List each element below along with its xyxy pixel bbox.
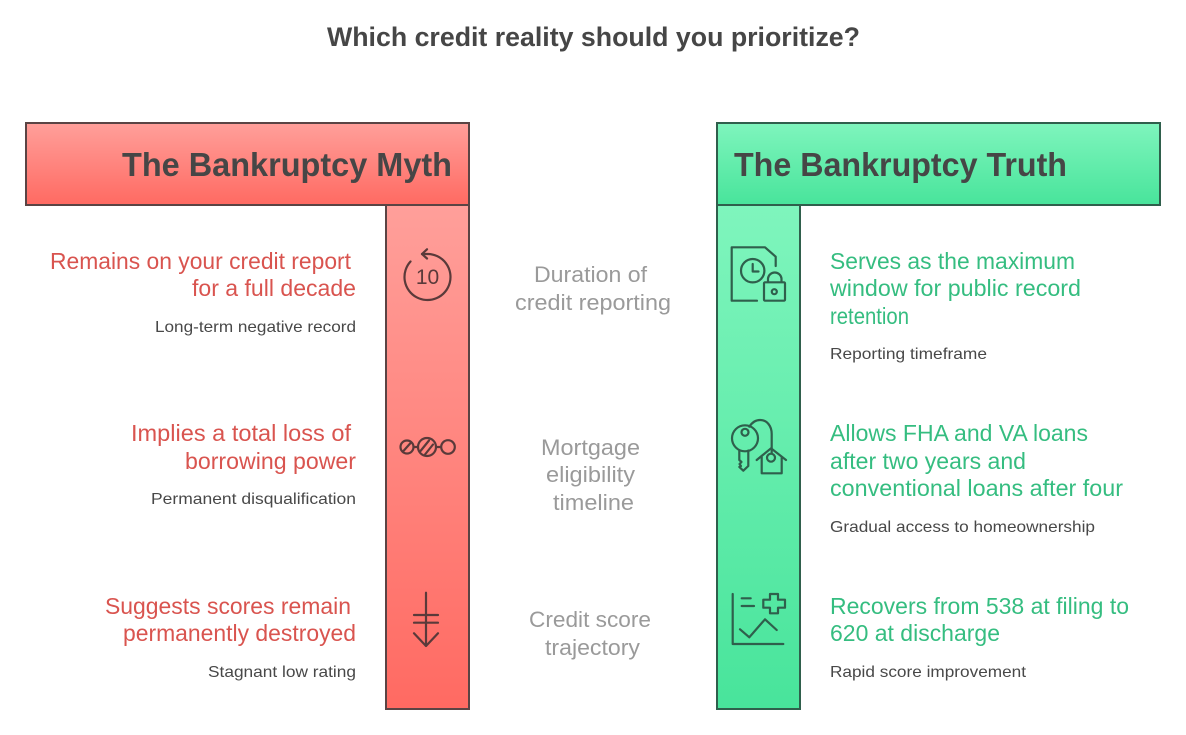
icon: key and house	[732, 420, 786, 473]
myth column	[386, 205, 469, 709]
label: mortgage: eligibility	[546, 462, 635, 487]
label: mortgage: timeline	[553, 490, 634, 515]
myth item 3: Suggests scores remain	[105, 593, 351, 619]
label: score: trajectory	[545, 635, 640, 660]
truth item 3: Rapid score improvement	[830, 664, 1027, 681]
truth item 2: conventional loans after four	[830, 475, 1123, 501]
icon: ten-year cycle: 10	[416, 266, 439, 289]
panel: myth	[26, 123, 469, 709]
truth item 2: Gradual access to homeownership	[830, 519, 1095, 536]
icon: chart with plus	[733, 594, 785, 644]
myth header: The Bankruptcy Myth	[122, 146, 452, 183]
center labels	[515, 262, 671, 660]
myth item 2: borrowing power	[185, 448, 356, 474]
myth item 1: Long-term negative record	[155, 319, 356, 336]
label: duration: Duration of	[534, 262, 648, 287]
myth item 3: Stagnant low rating	[208, 664, 356, 681]
title: Which credit reality should you prioritize?	[327, 22, 860, 52]
truth item 1: Serves as the maximum	[830, 248, 1075, 274]
truth item 3: 620 at discharge	[830, 620, 1000, 646]
icon: ten-year cycle	[404, 249, 450, 300]
truth item 3: Recovers from 538 at filing to	[830, 593, 1129, 619]
myth header	[26, 123, 469, 205]
truth item 3	[830, 593, 1129, 681]
myth item 2: Permanent disqualification	[151, 491, 356, 508]
myth item 2	[131, 420, 356, 508]
icon: document clock lock	[732, 247, 785, 301]
truth item 1	[829, 248, 1081, 363]
panel: truth	[717, 123, 1160, 709]
label: score: Credit score	[529, 607, 651, 632]
truth item 1: window for public record	[829, 275, 1081, 301]
label: mortgage	[541, 435, 640, 515]
truth column	[717, 205, 800, 709]
label: duration	[515, 262, 671, 315]
truth header: The Bankruptcy Truth	[734, 146, 1067, 183]
truth item 2: after two years and	[830, 448, 1026, 474]
myth item 1: Remains on your credit report	[50, 248, 352, 274]
myth item 1: for a full decade	[192, 275, 356, 301]
icon: blocked chain	[400, 438, 455, 456]
label: duration: credit reporting	[515, 290, 671, 315]
icon: down arrow	[414, 593, 438, 646]
truth item 2: Allows FHA and VA loans	[830, 420, 1088, 446]
truth item 2	[830, 420, 1123, 536]
truth item 1: retention	[830, 303, 909, 329]
myth item 1	[50, 248, 356, 336]
truth header	[717, 123, 1160, 205]
myth item 3	[105, 593, 356, 681]
truth item 1: Reporting timeframe	[830, 346, 987, 363]
label: mortgage: Mortgage	[541, 435, 640, 460]
label: score	[529, 607, 651, 660]
myth item 3: permanently destroyed	[123, 620, 356, 646]
myth item 2: Implies a total loss of	[131, 420, 352, 446]
